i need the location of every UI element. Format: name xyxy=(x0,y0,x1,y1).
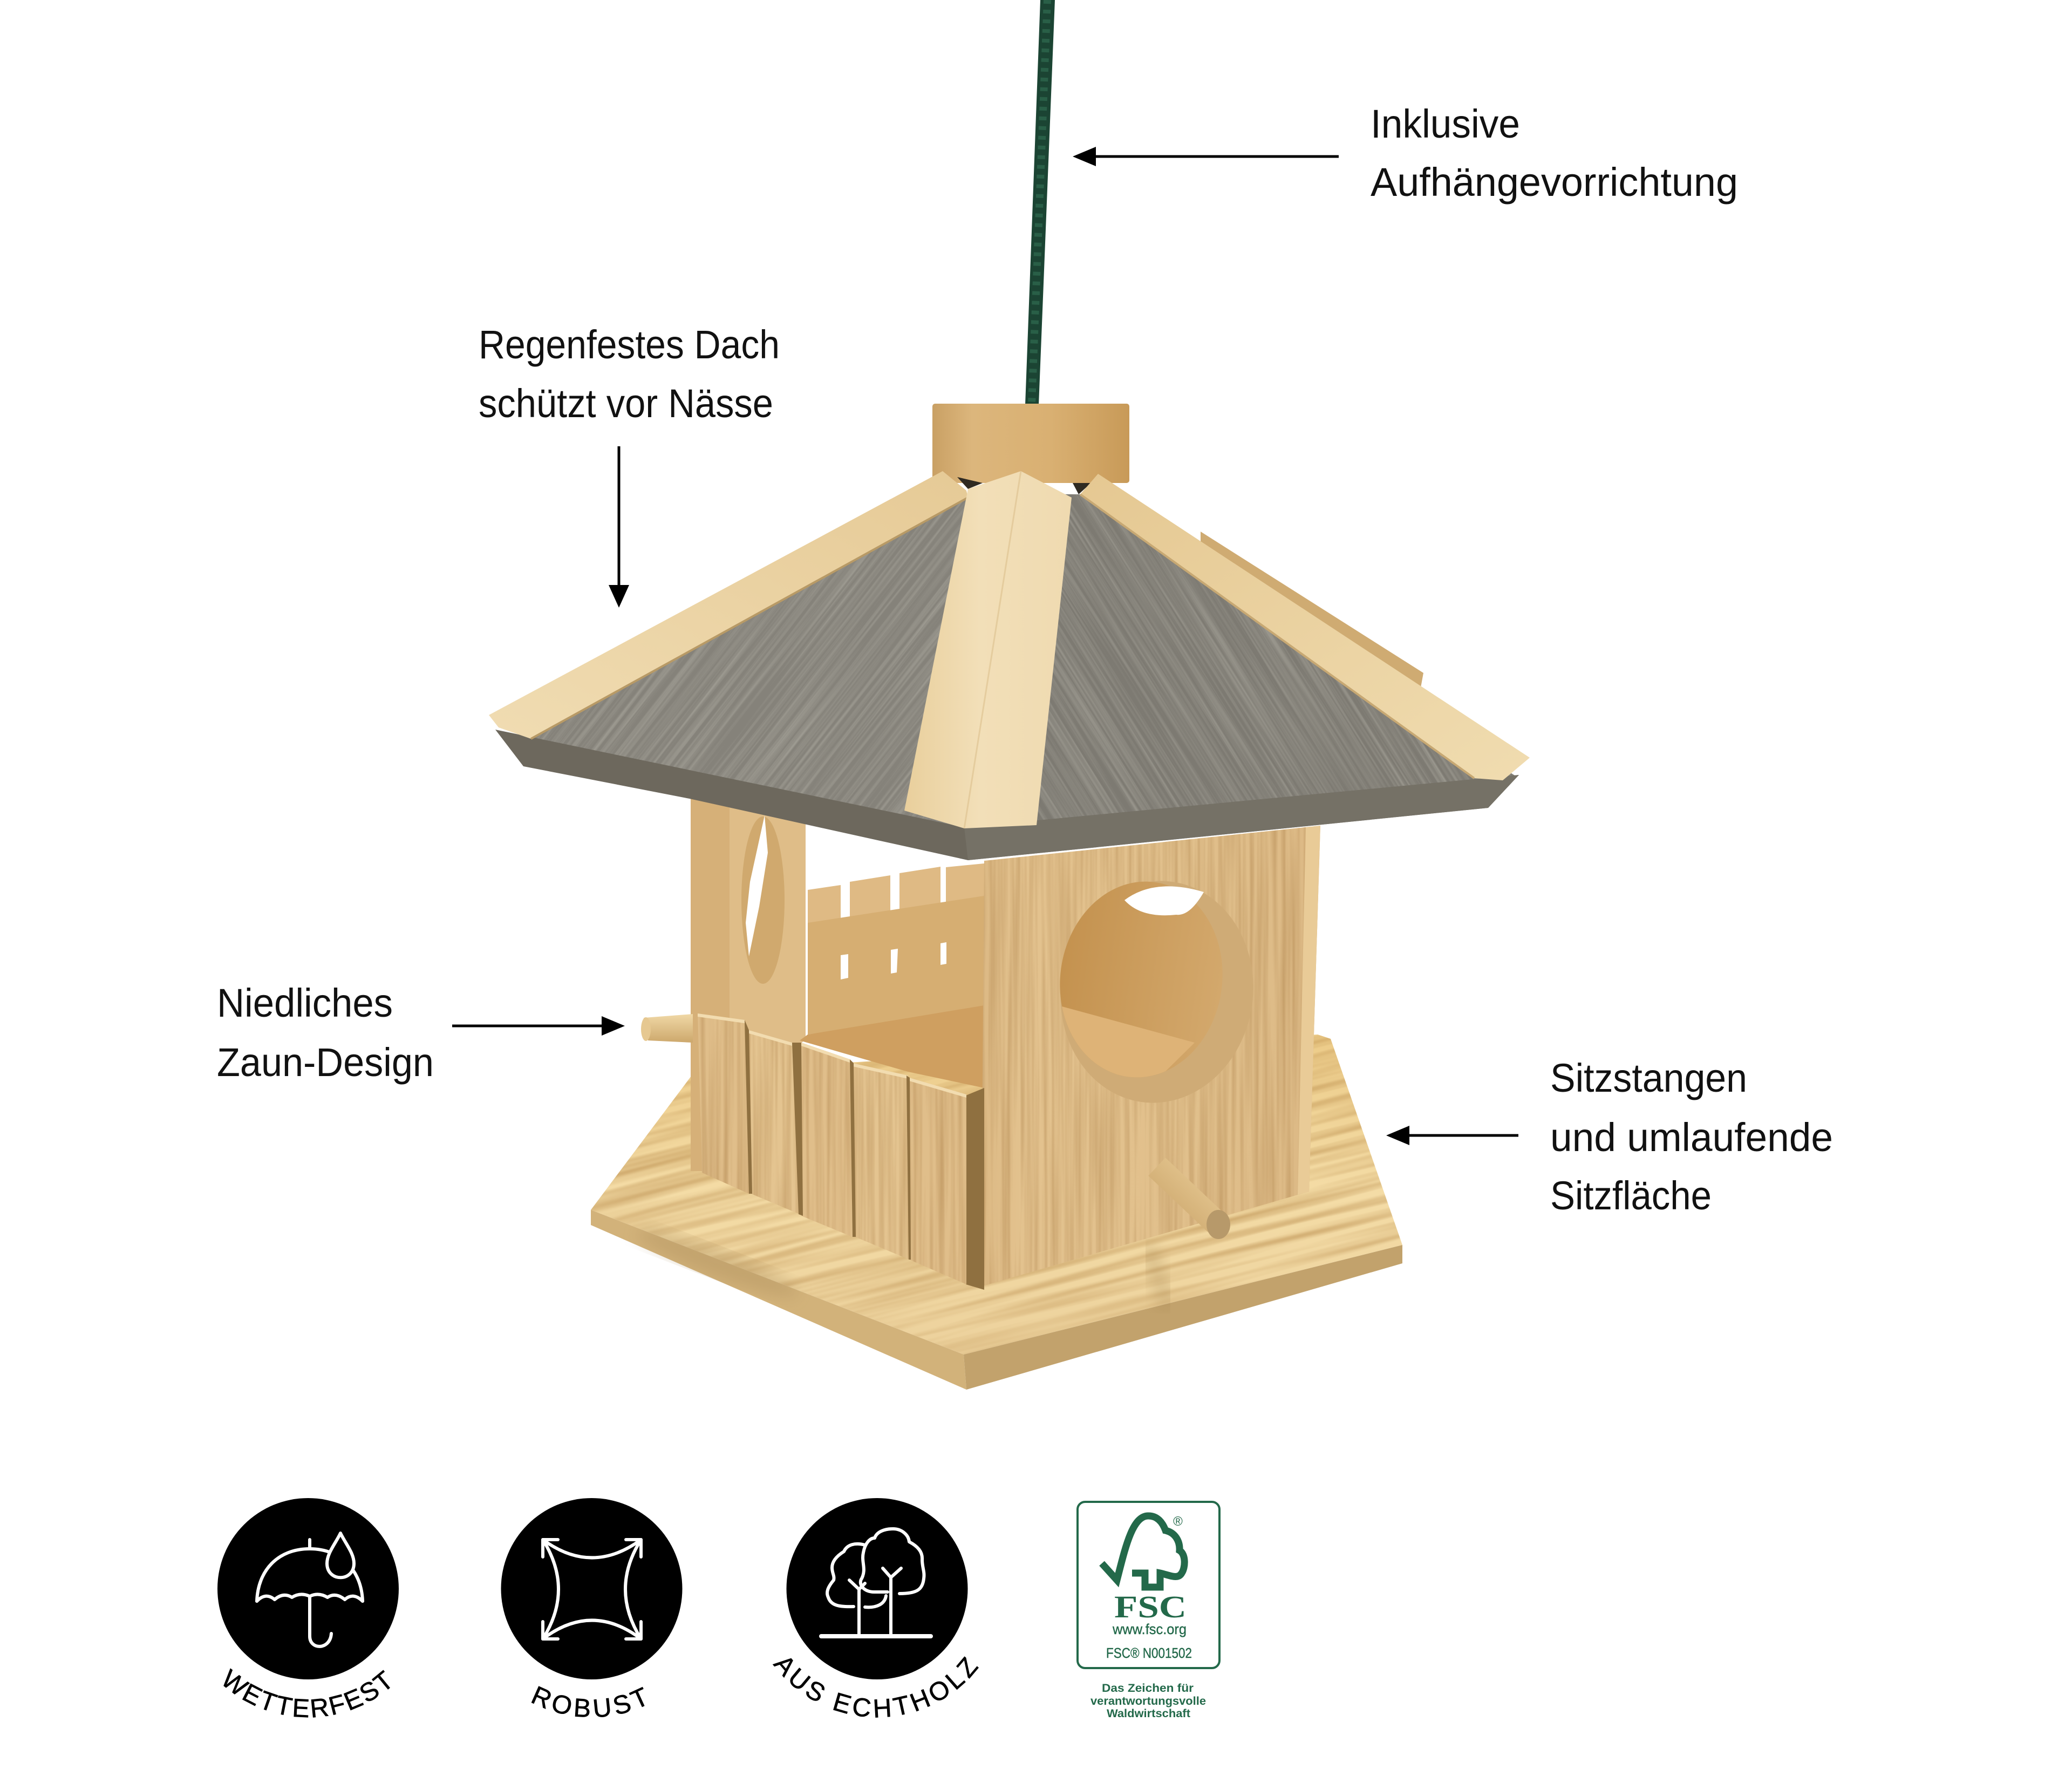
rear roof strip xyxy=(1201,532,1423,693)
arrow: to seating xyxy=(1386,1126,1518,1145)
badge: weatherproof xyxy=(217,1498,399,1718)
icon: flexing square with arrows xyxy=(543,1540,641,1639)
callout: hanging device: Aufhängevorrichtung xyxy=(1371,160,1738,205)
left roof plank xyxy=(489,471,968,739)
grey roof faces xyxy=(526,494,971,828)
callout: rainproof roof: schützt vor Nässe xyxy=(479,381,773,426)
badge: robust xyxy=(501,1498,682,1717)
FSC wordmark: FSC xyxy=(1114,1589,1187,1624)
label: AUS ECHTHOLZ: AUS ECHTHOLZ xyxy=(773,1656,979,1718)
FSC tagline xyxy=(1090,1682,1206,1720)
icon: FSC check-tree logo xyxy=(1102,1516,1184,1587)
front fence slats xyxy=(691,1004,984,1295)
FSC frame xyxy=(1078,1502,1219,1668)
right perch xyxy=(1148,1167,1230,1307)
base plate xyxy=(591,1035,1402,1390)
left perch xyxy=(641,1014,693,1043)
callout: rainproof roof xyxy=(479,322,780,426)
hanging cord xyxy=(1025,0,1055,405)
badge: real wood xyxy=(773,1498,979,1718)
FSC tagline: verantwortungsvolle xyxy=(1090,1695,1206,1707)
center roof plank xyxy=(904,471,1072,828)
callout: perches and seating: und umlaufende xyxy=(1550,1115,1833,1160)
wooden cap xyxy=(932,404,1129,483)
label: WETTERFEST: WETTERFEST xyxy=(223,1668,390,1718)
callout: fence design: Zaun-Design xyxy=(217,1040,434,1085)
callout: perches and seating: Sitzstangen xyxy=(1550,1056,1747,1100)
arrow: to hanging cord xyxy=(1073,147,1339,166)
FSC tagline: Das Zeichen für xyxy=(1102,1682,1194,1695)
photo: wooden bird feeder house xyxy=(218,0,1530,1679)
registered mark: ® xyxy=(1173,1514,1183,1529)
callout: fence design: Niedliches xyxy=(217,981,393,1025)
license code: FSC® N001502 xyxy=(1106,1645,1192,1661)
FSC tagline: Waldwirtschaft xyxy=(1107,1707,1190,1720)
arrow: to fence xyxy=(452,1016,625,1036)
roof xyxy=(489,404,1530,860)
callout: fence design xyxy=(217,981,434,1085)
right wall with round hole xyxy=(982,826,1320,1285)
callout: perches and seating xyxy=(1550,1056,1833,1218)
roof underside edge xyxy=(495,730,1519,860)
callout: rainproof roof: Regenfestes Dach xyxy=(479,322,780,367)
left roof post with oval hole xyxy=(691,799,806,1171)
icon: umbrella with drop xyxy=(257,1533,363,1646)
callout: hanging device: Inklusive xyxy=(1371,101,1520,146)
FSC certification mark xyxy=(1078,1502,1219,1720)
website: www.fsc.org xyxy=(1112,1621,1187,1637)
icon: two trees xyxy=(821,1529,931,1636)
label: ROBUST: ROBUST xyxy=(531,1686,644,1717)
right roof plank xyxy=(1080,474,1530,780)
callout: perches and seating: Sitzfläche xyxy=(1550,1173,1712,1218)
back fence xyxy=(808,863,984,1035)
floor xyxy=(800,1005,984,1088)
callout: hanging device xyxy=(1371,101,1738,205)
arrow: to roof xyxy=(609,446,629,608)
